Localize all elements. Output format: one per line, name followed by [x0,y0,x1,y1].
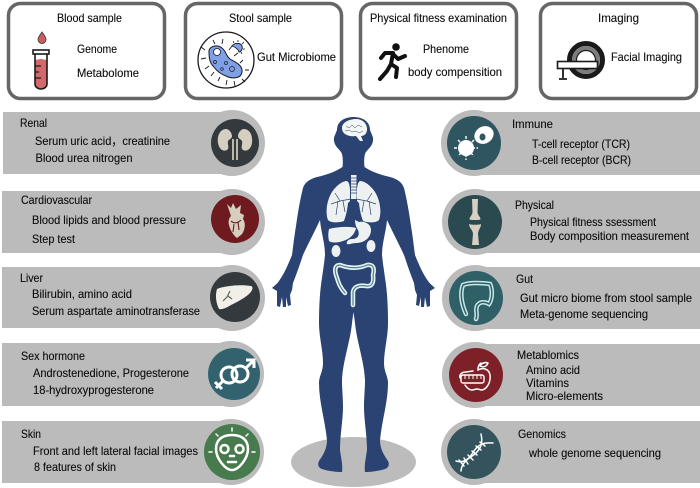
organ: brain [342,119,367,141]
panel: physical [442,189,700,255]
organ: liver [328,227,356,242]
panel: physical: Body composition measurement [530,229,690,243]
panel: gut [442,265,700,331]
panel: metablomics [442,342,700,408]
panel: genomics: Genomics [518,427,566,441]
panel: stool sample: Stool sample [229,11,292,25]
panel: cardiovascular [2,189,265,255]
icon: apple with tape measure [449,348,503,402]
panel: immune [441,110,700,176]
panel: immune: B-cell receptor (BCR) [532,153,631,167]
panel: blood sample [8,4,164,98]
panel: sex hormone: Androstenedione, Progesterone [33,366,189,380]
panel: immune: Immune [512,117,553,131]
panel: immune: T-cell receptor (TCR) [532,137,630,151]
panel: physical fitness examination: body compensition [408,65,502,79]
panel: cardiovascular: Step test [32,232,76,246]
panel: blood sample: Metabolome [77,66,139,80]
ground shadow [291,437,416,487]
icon: knee joint [448,195,502,249]
panel: renal: Renal [20,116,47,130]
panel: sex hormone: Sex hormone [21,349,85,363]
panel: imaging [540,4,696,98]
panel: cardiovascular: Cardiovascular [21,193,92,207]
icon: gut microbe [198,32,254,88]
icon: MRI scanner [558,44,602,79]
panel: gut: Gut [516,272,534,286]
panel: metablomics: Micro-elements [526,389,603,403]
icon: intestine [449,271,503,325]
panel: renal: Serum uric acid，creatinine [35,134,170,148]
panel: stool sample: Gut Microbiome [257,50,336,64]
icon: kidneys [211,119,259,167]
panel: metablomics: Metablomics [517,348,579,362]
panel: physical: Physical fitness ssessment [530,215,657,229]
icon: immune cells [447,116,501,170]
organ: kidneys [332,240,376,257]
panel: stool sample [186,4,342,98]
panel: renal: Blood urea nitrogen [36,151,132,165]
icon: face mask [204,424,260,480]
panel: metablomics: Vitamins [526,376,569,390]
panel: physical: Physical [515,198,554,212]
panel: metablomics: Amino acid [526,363,580,377]
panel: physical fitness examination: Physical fitness examination [370,11,507,25]
panel: physical fitness examination: Phenome [423,42,469,56]
organ: lungs and trachea [327,175,380,222]
panel: liver [2,265,265,331]
panel: skin: Front and left lateral facial images [33,444,198,458]
panel: blood sample: Genome [77,42,117,56]
panel: skin: Skin [21,427,41,441]
panel: liver: Bilirubin, amino acid [32,287,132,301]
icon: runner [380,43,405,79]
panel: skin [2,419,264,485]
icon: gender symbols [208,348,260,400]
panel: genomics [441,419,700,485]
panel: sex hormone: 18-hydroxyprogesterone [33,383,154,397]
panel: skin: 8 features of skin [34,460,116,474]
panel: liver: Liver [20,271,43,285]
panel: sex hormone [2,341,264,407]
icon: blood test tube [33,32,49,89]
panel: liver: Serum aspartate aminotransferase [32,304,200,318]
body silhouette [272,117,435,472]
panel: blood sample: Blood sample [57,11,122,25]
panel: cardiovascular: Blood lipids and blood pressure [32,213,186,227]
icon: liver [210,272,260,322]
icon: DNA helix [447,425,501,479]
panel: imaging: Facial Imaging [611,50,682,64]
organ: colon [335,265,374,305]
figure: human body with organs [272,117,435,487]
panel: genomics: whole genome sequencing [528,446,661,460]
panel: imaging: Imaging [598,11,639,25]
organ: stomach [347,220,371,244]
icon: heart [211,195,259,243]
panel: renal [3,110,265,176]
panel: gut: Meta-genome sequencing [520,307,648,321]
panel: physical fitness examination [360,4,516,98]
